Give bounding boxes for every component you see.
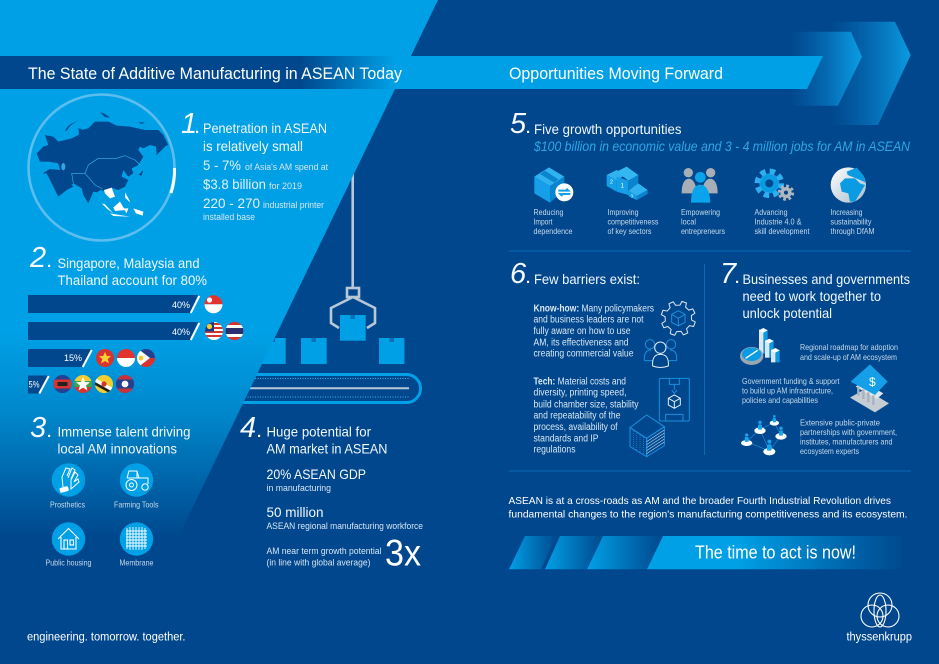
section 1: penetration: 1 (181, 108, 197, 140)
section 2: country share (28, 242, 244, 395)
label: reducing import dependence: Import (534, 216, 553, 226)
section 7: collaboration (720, 258, 910, 456)
icon: people (644, 340, 677, 367)
text: roadmap: and scale-up of AM ecosystem (800, 352, 897, 362)
flag: Laos (116, 375, 134, 393)
icon: bank (850, 364, 889, 412)
bar 5%: 5% (28, 380, 40, 390)
heading 5: . (526, 120, 530, 137)
heading 6: 6 (510, 258, 527, 290)
label: improving competitiveness: Improving (608, 207, 639, 217)
heading 4: . (257, 424, 261, 441)
label: improving competitiveness: competitiveness (608, 216, 658, 226)
section 1: penetration: 220 - 270 (203, 195, 260, 211)
label: increasing sustainability: sustainability (830, 216, 872, 226)
chevrons behind header (790, 22, 911, 125)
icon: import box (534, 167, 573, 203)
flag: Myanmar (74, 375, 92, 393)
heading 5: Five growth opportunities (534, 121, 682, 137)
section 3: talent (30, 412, 190, 568)
text: tech: and repeatability of the (534, 411, 621, 422)
text: tech: diversity, printing speed, (534, 388, 626, 399)
text: partnerships: partnerships with government, (800, 427, 897, 437)
text: know-how: Know-how: Many policymakers (534, 304, 654, 315)
text: partnerships: Extensive public-private (800, 418, 880, 428)
icon: prosthetics (52, 463, 85, 497)
stat: workforce (266, 504, 423, 531)
text: tech: regulations (534, 445, 576, 456)
heading 2 (29, 242, 207, 288)
label: empowering entrepreneurs: entrepreneurs (681, 226, 725, 236)
text: tech: process, availability of (534, 422, 618, 433)
label: advancing industrie 4.0 (754, 207, 810, 236)
bar 40% Malaysia and Thailand (28, 322, 199, 340)
text: know-how: AM, its effectiveness and (534, 337, 628, 348)
heading 6 (510, 258, 640, 290)
text: partnerships: institutes, manufacturers and (800, 436, 893, 446)
heading 4: 4 (240, 412, 256, 444)
heading 3: 3 (30, 412, 46, 444)
text: know-how: creating commercial value (534, 349, 634, 360)
section 1: penetration: industrial printer (263, 200, 324, 210)
label: empowering entrepreneurs: local (681, 216, 696, 226)
label: advancing industrie 4.0: Industrie 4.0 & (754, 216, 802, 226)
icon: network (741, 415, 787, 455)
bar 15%: 15% (64, 353, 82, 363)
call to action banner (509, 536, 905, 569)
icon: podium: 3 (631, 193, 634, 198)
stat: GDP: 20% ASEAN GDP (266, 466, 366, 482)
text: funding (742, 376, 840, 405)
closing statement: ASEAN is at a cross-roads as AM and the broader Fourth Industrial Revolution drives (508, 495, 891, 507)
text: tech (534, 376, 638, 456)
icon: podium: 2 (610, 179, 613, 185)
heading 7: Businesses and governments (742, 271, 910, 287)
heading right: Opportunities Moving Forward (509, 65, 723, 83)
heading 7: need to work together to (742, 288, 881, 304)
conveyor belt (200, 374, 420, 402)
label: reducing import dependence (534, 207, 573, 236)
icon: podium: 1 (621, 183, 625, 189)
heading 7: 7 (720, 258, 738, 290)
tagline: engineering. tomorrow. together. (27, 632, 186, 644)
closing statement (508, 495, 908, 520)
label: improving competitiveness (608, 207, 658, 236)
text: funding: Government funding & support (742, 376, 840, 386)
text: funding: to build up AM infrastructure, (742, 386, 833, 396)
boxes (260, 315, 404, 364)
closing statement: fundamental changes to the region's manufacturing competitiveness and its ecosystem. (508, 508, 908, 520)
section 1: penetration: Penetration in ASEAN (203, 120, 327, 136)
icon: membrane (120, 522, 153, 556)
stat: GDP (266, 466, 366, 493)
heading 2: 2 (29, 242, 46, 274)
stat: workforce: ASEAN regional manufacturing workforce (266, 521, 423, 531)
heading 2: . (47, 254, 51, 271)
text: funding: policies and capabilities (742, 395, 818, 405)
heading 5 (510, 108, 911, 154)
text: know-how: and business leaders are not (534, 315, 644, 326)
flag: Malaysia (205, 322, 223, 340)
icon: globe (831, 167, 866, 203)
section 1: penetration: . (195, 120, 199, 137)
flag: Cambodia (53, 375, 72, 393)
flag: Singapore (204, 295, 223, 314)
icon: bank: $ (869, 375, 876, 389)
label: reducing import dependence: dependence (534, 226, 573, 236)
bar 15% (28, 349, 92, 367)
bar 5% (28, 376, 49, 394)
flag: Indonesia (117, 349, 135, 367)
label: prosthetics: Prosthetics (50, 500, 85, 510)
label: improving competitiveness: of key sectors (608, 226, 652, 236)
section 1: penetration: 5 - 7% (203, 157, 241, 173)
text: roadmap: Regional roadmap for adoption (800, 342, 898, 352)
heading left: The State of Additive Manufacturing in ASEAN Today (28, 65, 403, 83)
bar 40% Singapore: 40% (172, 300, 190, 310)
section 1: penetration: for 2019 (269, 181, 302, 191)
stat: growth: (in line with global average) (266, 558, 371, 568)
text: partnerships: ecosystem experts (800, 446, 859, 456)
icon: entrepreneurs (682, 168, 718, 203)
robotic arm and conveyor illustration (200, 170, 420, 402)
heading 4 (240, 412, 388, 456)
icon: 3D printer (659, 378, 689, 421)
label: empowering entrepreneurs (681, 207, 725, 236)
section 1: penetration (181, 108, 328, 222)
claw (331, 170, 375, 328)
heading 2: Thailand account for 80% (58, 272, 207, 288)
heading 3: . (47, 424, 51, 441)
light blue diagonal panel (0, 0, 438, 664)
heading 3 (30, 412, 190, 456)
heading 7: . (735, 270, 739, 287)
heading 3: Immense talent driving (58, 424, 190, 440)
flag: Brunei (95, 375, 113, 395)
label: farming tools: Farming Tools (114, 500, 158, 510)
call to action banner: The time to act is now! (695, 542, 856, 562)
heading 4: AM market in ASEAN (266, 440, 388, 456)
icon: compass and bars (740, 328, 780, 365)
logo: thyssenkrupp (846, 593, 912, 644)
label: increasing sustainability: through DfAM (830, 226, 874, 236)
text: tech: standards and IP (534, 433, 599, 444)
label: advancing industrie 4.0: skill development (754, 226, 810, 236)
text: tech: Tech: Material costs and (534, 376, 626, 387)
flag: Thailand (225, 322, 244, 340)
label: membrane: Membrane (120, 558, 154, 568)
icon: public housing (52, 522, 85, 556)
icon: podium (607, 167, 648, 200)
section 1: penetration: installed base (203, 212, 255, 222)
section 1: penetration: of Asia's AM spend at (245, 162, 328, 172)
section 5: growth opportunities (510, 108, 911, 236)
stat: growth (266, 532, 421, 574)
bar 40% Singapore (28, 295, 199, 313)
header band (0, 56, 823, 89)
label: public housing: Public housing (46, 558, 92, 568)
flag: Vietnam (96, 349, 114, 367)
text: roadmap (800, 342, 898, 362)
section 1: penetration: is relatively small (203, 138, 303, 154)
icon: gears (757, 171, 793, 199)
section 4: market potential (240, 412, 423, 574)
heading 6: . (526, 270, 530, 287)
section 6: barriers (510, 258, 700, 457)
icon: gear with cube (656, 296, 700, 340)
heading 2: Singapore, Malaysia and (58, 255, 200, 271)
label: increasing sustainability (830, 207, 874, 236)
bar 40% Malaysia and Thailand: 40% (172, 327, 190, 337)
map circle of Asia (28, 94, 175, 240)
heading 6: Few barriers exist: (534, 271, 640, 287)
text: know-how: fully aware on how to use (534, 326, 631, 337)
text: know-how (534, 304, 654, 360)
stat: growth: AM near term growth potential (266, 546, 382, 556)
label: reducing import dependence: Reducing (534, 207, 564, 217)
icon: stack of layers (630, 415, 664, 457)
text: partnerships (800, 418, 897, 456)
heading 4: Huge potential for (266, 424, 371, 440)
heading 5: 5 (510, 108, 527, 140)
section 1: penetration: $3.8 billion (203, 176, 266, 192)
flag: Philippines (137, 348, 155, 368)
stat: GDP: in manufacturing (266, 483, 331, 493)
label: advancing industrie 4.0: Advancing (754, 207, 788, 217)
stat: growth: 3x (385, 532, 421, 574)
icon: tractor (120, 463, 153, 497)
logo: thyssenkrupp: thyssenkrupp (846, 632, 912, 644)
heading 3: local AM innovations (58, 440, 177, 456)
label: increasing sustainability: Increasing (830, 207, 863, 217)
text: tech: build chamber size, stability (534, 399, 638, 410)
heading 7: unlock potential (742, 305, 832, 321)
stat: workforce: 50 million (266, 504, 324, 520)
label: empowering entrepreneurs: Empowering (681, 207, 720, 217)
heading 7 (720, 258, 910, 321)
